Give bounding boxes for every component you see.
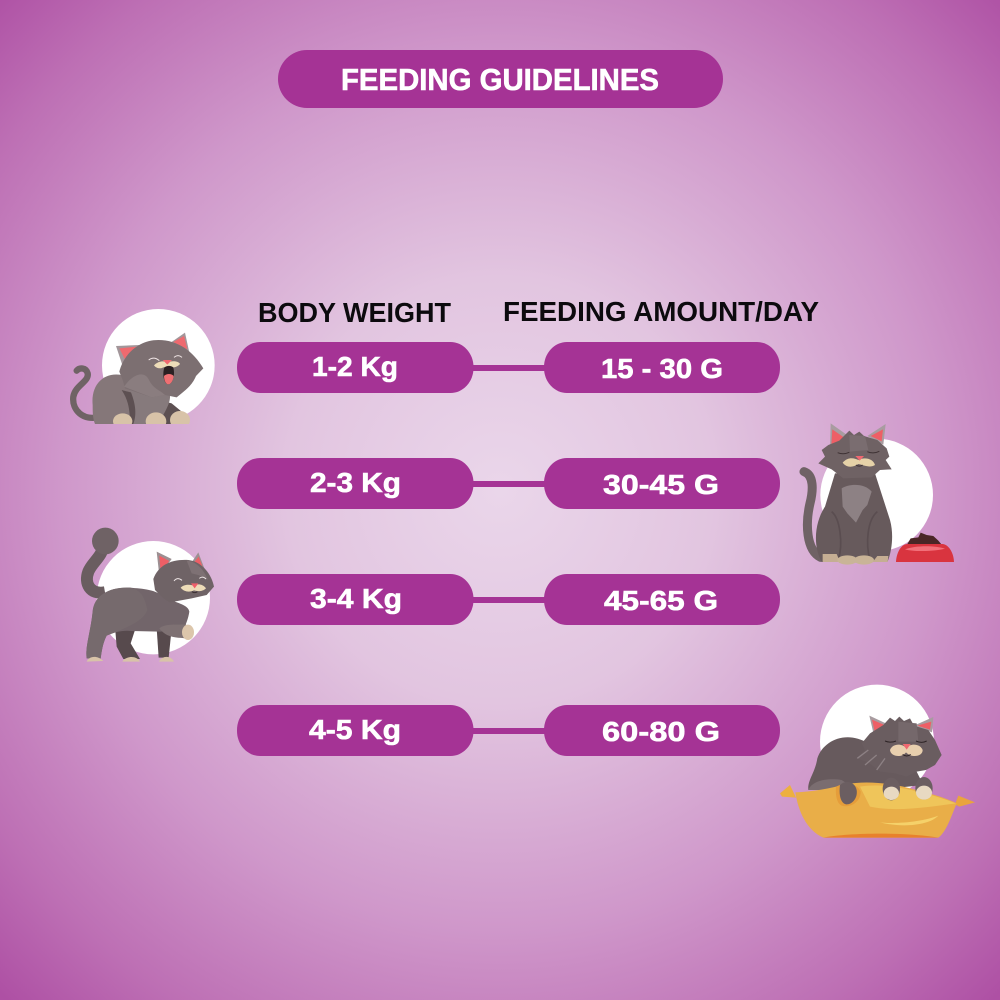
- row: 2-3 Kg to 30-45 G: 30-45 G: [603, 469, 719, 500]
- row: 4-5 Kg to 60-80 G: 4-5 Kg: [309, 714, 401, 745]
- row: 1-2 Kg to 15-30 G: [237, 342, 780, 393]
- icon: fluffy cat on cushion: [780, 685, 975, 838]
- row: 2-3 Kg to 30-45 G: [237, 458, 780, 509]
- row: 4-5 Kg to 60-80 G: [237, 705, 780, 756]
- row: 3-4 Kg to 45-65 G: [237, 574, 780, 625]
- icon: meowing cat: [73, 309, 215, 430]
- heading: feeding amount per day: FEEDING AMOUNT/DAY: [503, 296, 819, 327]
- title: [278, 50, 723, 108]
- row: 2-3 Kg to 30-45 G: 2-3 Kg: [310, 467, 401, 498]
- row: 3-4 Kg to 45-65 G: 3-4 Kg: [310, 583, 402, 614]
- row: 4-5 Kg to 60-80 G: 60-80 G: [602, 716, 720, 747]
- icon: sitting cat with food bowl: [804, 423, 954, 565]
- title: FEEDING GUIDELINES: [341, 63, 659, 97]
- icon: walking cat: [86, 528, 214, 662]
- row: 1-2 Kg to 15-30 G: 15 - 30 G: [601, 353, 723, 384]
- row: 3-4 Kg to 45-65 G: 45-65 G: [604, 585, 718, 616]
- row: 1-2 Kg to 15-30 G: 1-2 Kg: [312, 351, 398, 382]
- heading: body weight: BODY WEIGHT: [258, 297, 451, 328]
